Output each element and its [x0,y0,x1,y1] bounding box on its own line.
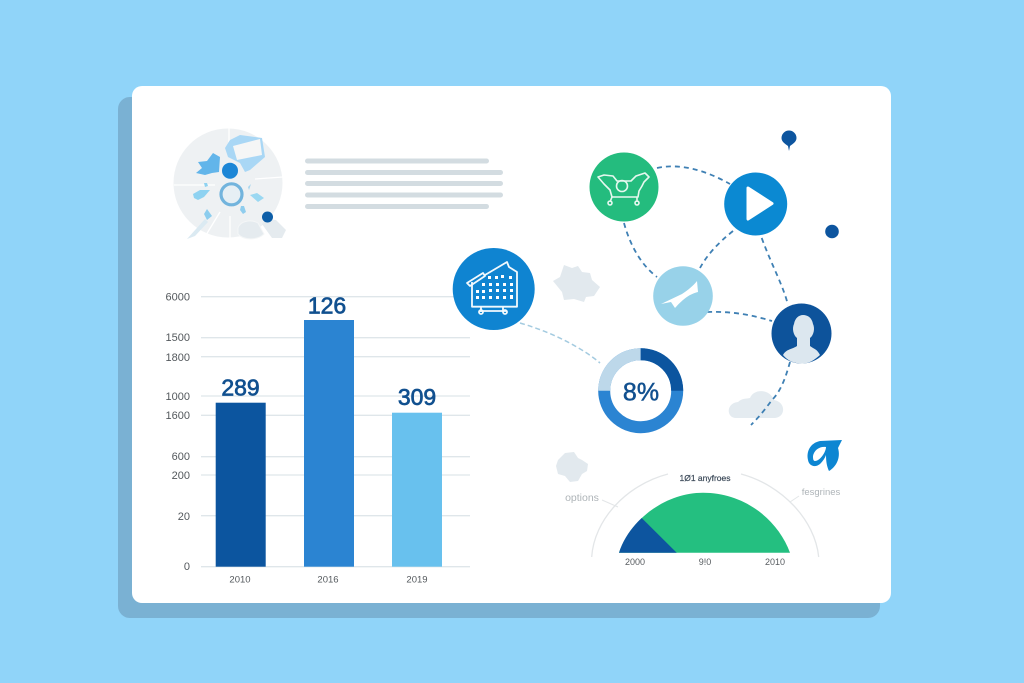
y axis labels: 6000 [166,292,190,304]
bar values: 309 [398,384,436,410]
gauge green area [619,493,790,553]
bar values: 126 [308,292,346,318]
icon: play circle [724,172,787,236]
icon: map pin [782,131,796,151]
bar values [221,292,436,410]
icon: building circle [453,248,535,330]
y axis labels: 20 [178,511,190,523]
icon: profile circle [772,304,832,364]
x axis labels: 2016 [317,575,339,586]
y axis labels: 600 [172,451,190,463]
bar 2016 [304,320,354,567]
icon: dot [825,225,839,238]
y axis labels: 1800 [166,352,190,364]
x axis labels: 2010 [229,575,251,586]
icon: green cart circle [590,152,658,222]
icon: swirl logo [808,440,842,471]
gauge title: 1Ø1 anyfroes [679,473,731,483]
bar 2019 [392,413,442,567]
cloud [729,391,783,418]
bar chart [166,292,470,586]
y axis labels: 1600 [166,410,190,422]
y axis labels: 1000 [166,391,190,403]
gauge labels: 9!0 [699,557,711,567]
gauge labels [625,557,785,567]
card shadow [118,97,880,618]
illustration: radial emblem [174,128,286,239]
side label right: fesgrines [802,487,841,498]
bar 2010 [216,403,266,567]
bar values: 289 [221,375,260,401]
main white card [132,86,891,603]
side label left: options [565,492,599,504]
y axis labels: 1500 [166,332,190,344]
donut chart [604,354,677,427]
gauge chart [565,473,841,567]
y axis labels: 200 [172,470,190,482]
gauge navy area [619,518,677,553]
x axis labels: 2019 [406,575,428,586]
decorative blob lower [556,452,588,482]
dashed connector: building to donut [520,323,600,363]
gauge labels: 2000 [625,557,645,567]
dashed connectors [624,166,790,425]
text placeholder lines [305,158,503,209]
y axis labels: 0 [184,561,190,573]
gauge labels: 2010 [765,557,785,567]
icon: paper plane circle [653,266,713,326]
y axis labels [166,292,190,573]
donut value: 8% [623,378,659,406]
decorative blob [553,265,600,302]
gauge arc [592,474,819,557]
x axis labels [229,575,428,586]
